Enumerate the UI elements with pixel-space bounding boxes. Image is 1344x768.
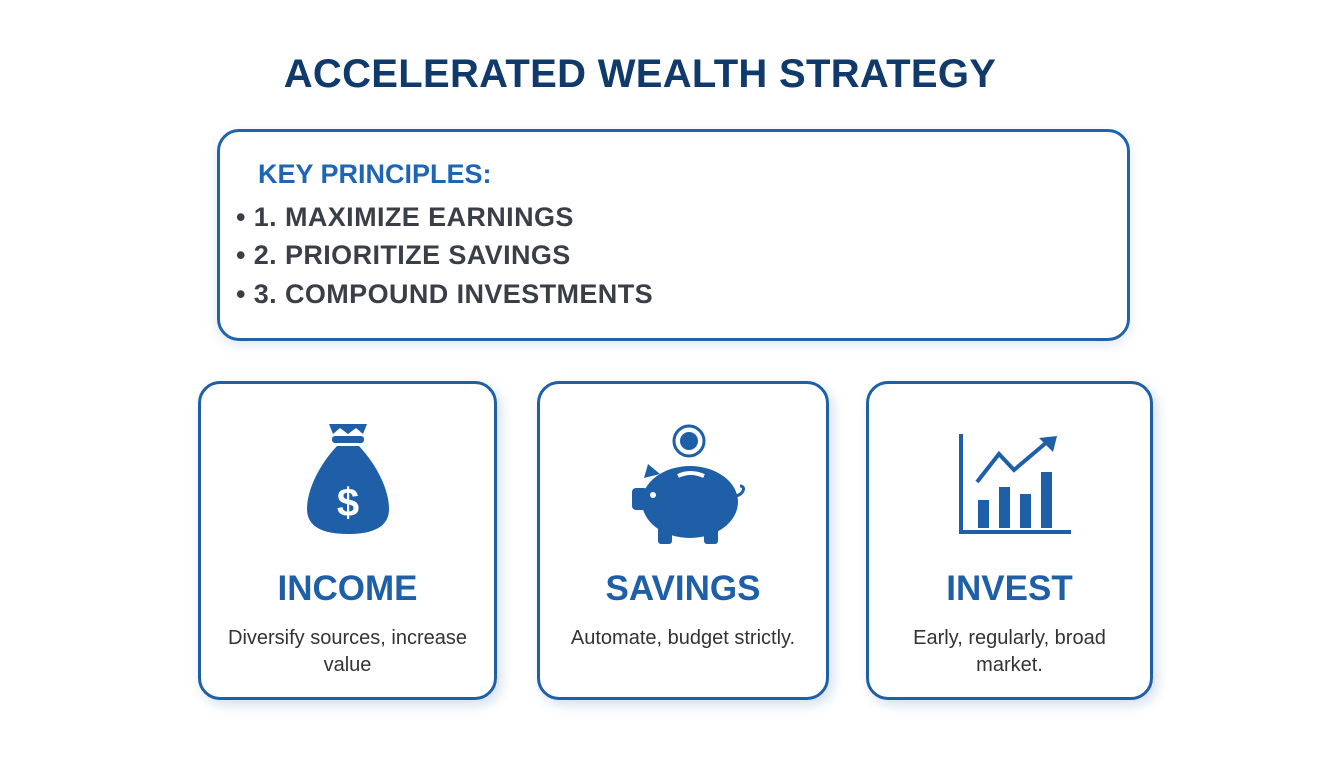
list item 1: • 1. MAXIMIZE EARNINGS	[236, 202, 574, 232]
card: invest	[866, 381, 1153, 700]
icon: piggy bank	[632, 424, 745, 544]
list item 3: • 3. COMPOUND INVESTMENTS	[236, 279, 653, 309]
heading: key principles: KEY PRINCIPLES:	[258, 159, 492, 189]
list item 2: • 2. PRIORITIZE SAVINGS	[236, 240, 571, 270]
heading: income: INCOME	[278, 569, 418, 608]
title: ACCELERATED WEALTH STRATEGY	[284, 52, 996, 96]
text: savings: Automate, budget strictly.	[571, 627, 795, 649]
heading: invest: INVEST	[946, 569, 1073, 608]
text: invest: Early, regularly, broad market.	[913, 627, 1106, 676]
icon: growth chart	[959, 434, 1071, 534]
text: income: Diversify sources, increase value	[228, 627, 467, 676]
card: income	[198, 381, 497, 700]
panel: key principles	[217, 129, 1130, 341]
card: savings	[537, 381, 829, 700]
heading: savings: SAVINGS	[606, 569, 760, 608]
icon: money bag	[307, 424, 389, 534]
icon: money bag: $	[337, 481, 359, 525]
